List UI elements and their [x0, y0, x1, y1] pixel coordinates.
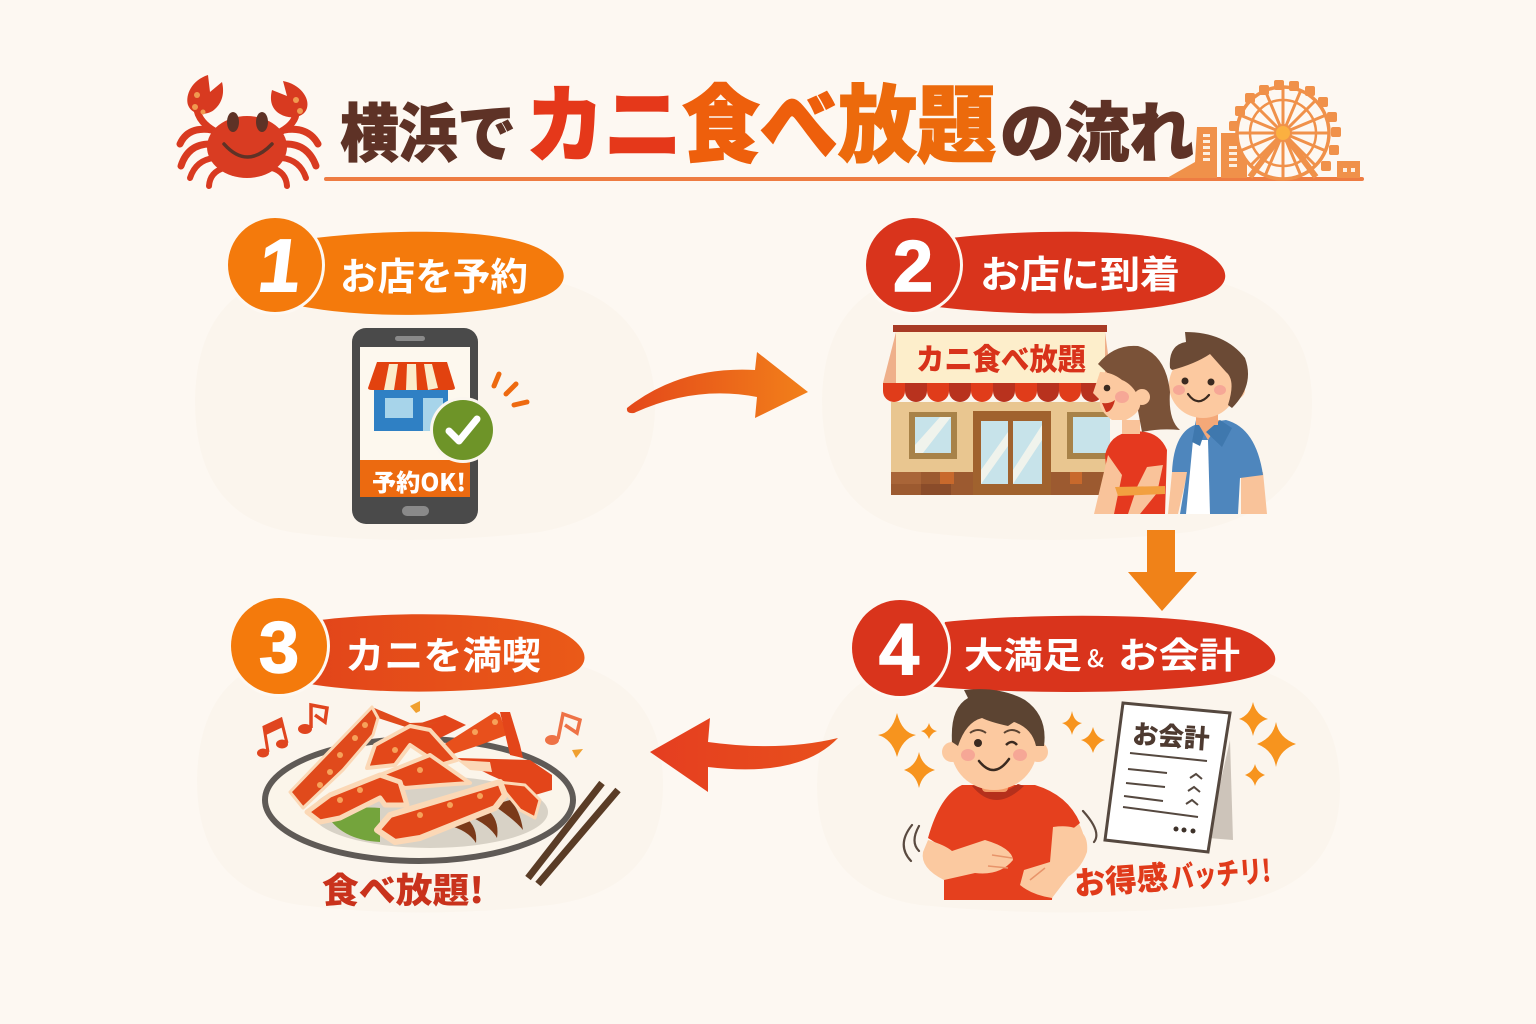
title text: カニ食べ放題: 放題 — [838, 59, 996, 180]
panel: step 2 — [822, 215, 1312, 540]
step 2 banner — [863, 215, 1225, 315]
title text: カニ食べ放題: カニ — [526, 59, 682, 180]
title text: カニ食べ放題 — [526, 59, 996, 180]
icon: restaurant storefront: カニ食べ放題 — [916, 335, 1086, 379]
step 3 banner: 3 — [259, 608, 299, 688]
icon: phone with reservation: 予約OK! — [372, 463, 466, 498]
arrow: step 1 to 2 — [627, 352, 808, 418]
icon: couple — [1093, 332, 1267, 514]
panel 1 background — [195, 268, 655, 540]
step 3 banner: カニを満喫 — [345, 625, 541, 680]
step 4 banner: 4 — [879, 610, 919, 690]
icon: plate of crab legs — [265, 707, 618, 884]
arrow: step 2 to 4 — [1128, 530, 1197, 611]
icon: happy man — [904, 689, 1096, 900]
woman — [1105, 431, 1167, 514]
step 2 banner: 2 — [893, 227, 933, 307]
man — [1168, 470, 1267, 514]
icon: crab — [180, 75, 318, 186]
step 4 banner: & — [1087, 639, 1104, 674]
step 1 banner — [225, 215, 564, 315]
step 4 banner: お会計 — [1118, 627, 1240, 679]
chopsticks — [528, 783, 618, 884]
arrow: step 4 to 3 — [650, 718, 838, 792]
step 4 banner: 大満足 — [964, 627, 1082, 679]
panel: step 1 — [195, 215, 655, 540]
crab legs — [290, 707, 552, 842]
panel: step 3 — [197, 595, 663, 914]
icon: sparkles — [878, 702, 1296, 788]
step 1 banner: お店を予約 — [340, 246, 528, 301]
icon: bill: お会計 — [1131, 714, 1211, 756]
caption: お得感バッチリ!: お得感 — [1072, 853, 1169, 905]
step 4 banner — [849, 597, 1275, 699]
panel 3 background — [197, 651, 663, 912]
title text: カニ食べ放題: 食べ — [682, 59, 838, 180]
title underline — [324, 177, 1364, 181]
caption: お得感バッチリ!: バッチリ! — [1169, 846, 1272, 897]
icon: bill — [1105, 703, 1233, 852]
skyline buildings — [1167, 127, 1360, 178]
step 1 banner: 1 — [254, 224, 306, 307]
step 2 banner: お店に到着 — [980, 244, 1180, 299]
title text: 横浜で: 横浜で — [340, 84, 516, 175]
title text: の流れ: の流れ — [1000, 81, 1194, 175]
panel 2 background — [822, 268, 1312, 540]
caption: 食べ放題!: 食べ放題! — [322, 863, 484, 914]
icon: ferris wheel and skyline — [1167, 80, 1360, 179]
panel: step 4 — [817, 597, 1340, 912]
icon: restaurant storefront — [883, 325, 1112, 495]
icon: music notes — [257, 701, 583, 758]
caption: お得感バッチリ! — [1072, 845, 1272, 905]
panel 4 background — [817, 655, 1340, 912]
step 3 banner — [228, 595, 585, 697]
icon: phone with reservation — [352, 328, 527, 524]
title — [340, 59, 1194, 180]
